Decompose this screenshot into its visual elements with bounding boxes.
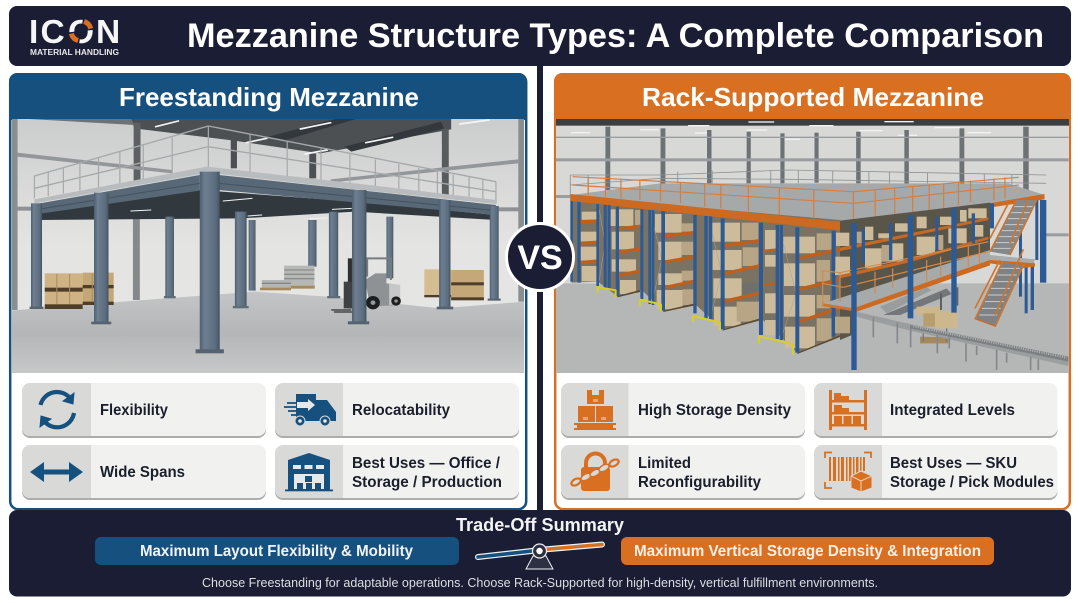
feature: limited reconfigurability	[561, 445, 805, 500]
feature: best uses sku storage pick modules: Storage / Pick Modules	[890, 474, 1054, 491]
feature: flexibility: Flexibility	[100, 402, 168, 419]
feature: integrated levels: Integrated Levels	[890, 402, 1015, 419]
logo: ICON	[29, 14, 120, 51]
summary caption: Choose Freestanding for adaptable operations. Choose Rack-Supported for high-density, vertical fulfillment environments.	[202, 576, 878, 590]
feature: high storage density: High Storage Density	[638, 402, 791, 419]
heading: rack-supported: Rack-Supported Mezzanine	[642, 82, 984, 112]
pallet racks, left facade	[570, 197, 840, 355]
center divider	[537, 66, 543, 510]
icon: balance scale	[478, 544, 602, 569]
pill: rack-supported benefit	[621, 537, 994, 565]
icon: double arrow	[30, 462, 83, 482]
photo: rack-supported mezzanine warehouse	[554, 118, 1070, 375]
vs badge	[506, 224, 574, 290]
feature: wide spans: Wide Spans	[100, 464, 185, 481]
feature: wide spans	[22, 445, 266, 500]
summary heading: Trade-Off Summary	[456, 515, 624, 535]
header bar	[9, 6, 1071, 66]
feature: integrated levels	[814, 383, 1058, 438]
panel: freestanding mezzanine	[9, 73, 527, 509]
feature: flexibility	[22, 383, 266, 438]
heading: freestanding: Freestanding Mezzanine	[119, 82, 419, 112]
feature: relocatability: Relocatability	[352, 402, 450, 419]
vs badge: VS	[517, 239, 563, 277]
pill: freestanding benefit	[95, 537, 459, 565]
icon: warehouse	[285, 453, 333, 491]
trade-off summary panel	[9, 510, 1071, 596]
pill: rack-supported benefit: Maximum Vertical Storage Density & Integration	[634, 543, 981, 560]
feature: best uses office storage production: Storage / Production	[352, 474, 502, 491]
title: Mezzanine Structure Types: A Complete Comparison	[187, 17, 1044, 55]
right racks, walkway, stairs and conveyor	[822, 200, 1068, 370]
feature: best uses office storage production	[275, 445, 519, 500]
feature: high storage density	[561, 383, 805, 438]
icon: padlock with chain	[570, 454, 620, 491]
photo: freestanding mezzanine warehouse	[10, 118, 527, 375]
mezzanine beams and front railing	[570, 177, 1045, 233]
icon: delivery truck	[284, 394, 336, 426]
icon: stacked boxes on pallet	[574, 390, 616, 430]
feature: best uses sku storage pick modules	[814, 445, 1058, 500]
icon: barcode and parcel	[825, 452, 872, 492]
feature: relocatability	[275, 383, 519, 438]
feature: best uses sku storage pick modules: Best Uses — SKU	[890, 455, 1017, 472]
feature: limited reconfigurability: Reconfigurability	[638, 474, 761, 491]
icon: pallet rack	[829, 390, 867, 430]
icon: refresh arrows	[40, 392, 74, 427]
panel: rack-supported mezzanine	[554, 73, 1071, 509]
logo: MATERIAL HANDLING	[30, 48, 119, 57]
feature: limited reconfigurability: Limited	[638, 455, 691, 472]
pill: freestanding benefit: Maximum Layout Flexibility & Mobility	[140, 543, 413, 560]
feature: best uses office storage production: Best Uses — Office /	[352, 455, 501, 472]
